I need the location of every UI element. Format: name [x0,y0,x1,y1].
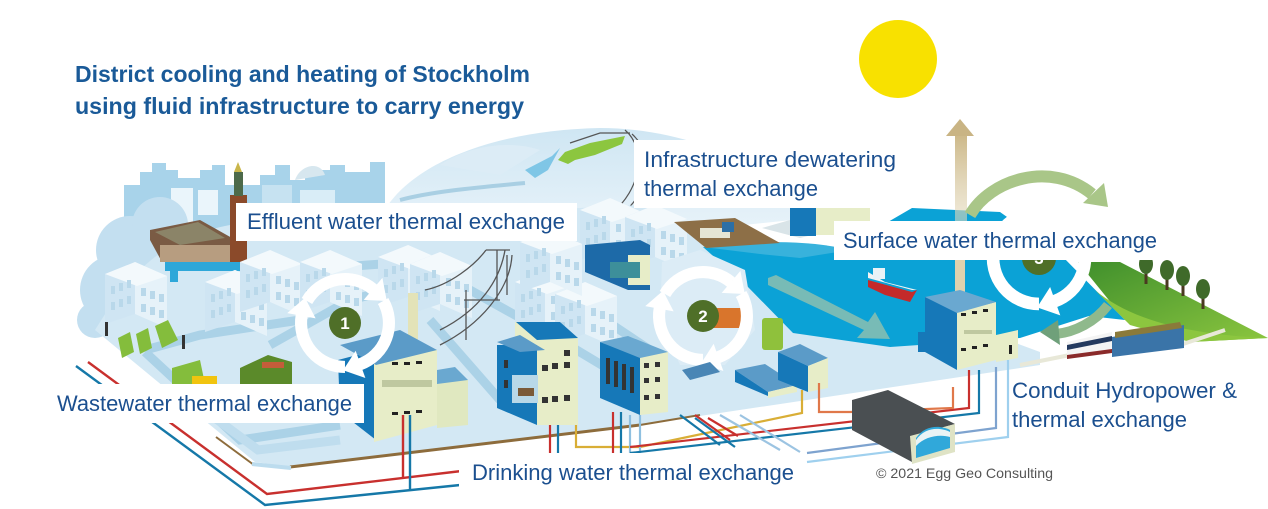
skyline [124,162,385,230]
label: conduit hydropower and thermal exchange: thermal exchange [1012,407,1187,432]
label: drinking water thermal exchange: Drinking water thermal exchange [472,460,794,485]
title [75,61,530,119]
label: effluent water thermal exchange [236,203,577,241]
copyright: © 2021 Egg Geo Consulting [876,465,1053,481]
cloud trees on the left [77,197,490,338]
cycle 3 with number badge: 3 [1034,249,1044,268]
label: infrastructure dewatering thermal exchange: Infrastructure dewatering [644,147,896,172]
label: wastewater thermal exchange [48,384,364,423]
low solar buildings and green tank [682,318,828,398]
pier field and far buildings [674,205,870,248]
cycle 3 with number badge [976,211,1100,319]
title: using fluid infrastructure to carry energy [75,93,524,119]
cycle 2 with number badge: 2 [698,307,708,326]
label: effluent water thermal exchange: Effluent water thermal exchange [247,209,565,234]
town hall [150,162,247,282]
label: drinking water thermal exchange [459,453,806,499]
cycle 1 with number badge: 1 [340,314,350,333]
green hill [1078,262,1268,342]
pipes left [76,362,470,505]
map of Sweden with power line [558,130,647,214]
tunnel [852,390,955,464]
cycle 1 with number badge [285,278,403,382]
sun [859,20,937,98]
cycle 2 with number badge [643,250,761,375]
train and tracks [1020,322,1225,365]
pale houses [105,198,687,348]
factory 1 [338,293,468,442]
label: infrastructure dewatering thermal exchange: thermal exchange [644,176,818,201]
lake flow arrow [768,275,890,339]
label: surface water thermal exchange: Surface water thermal exchange [843,228,1157,253]
background globe dome [388,128,840,240]
label: wastewater thermal exchange: Wastewater thermal exchange [57,391,352,416]
ground platform [95,205,1040,468]
green curved cycle arrows [970,176,1108,345]
ship [868,268,917,302]
recycling bins and truck [105,320,292,385]
roads [145,262,660,450]
label: conduit hydropower and thermal exchange [1012,378,1237,432]
label: infrastructure dewatering thermal exchange [634,140,912,208]
pipes under buildings [550,360,1008,465]
lake [703,208,1125,347]
office building 2 [497,322,578,425]
trees [1139,254,1210,309]
factory 2 [918,290,1018,370]
power pylons and lines [425,250,512,345]
shops [585,240,650,290]
tan heat arrow [946,119,974,295]
office building 3 [600,336,668,415]
label: conduit hydropower and thermal exchange: Conduit Hydropower & [1012,378,1237,403]
title: District cooling and heating of Stockholm [75,61,530,87]
label: surface water thermal exchange [834,221,1170,260]
